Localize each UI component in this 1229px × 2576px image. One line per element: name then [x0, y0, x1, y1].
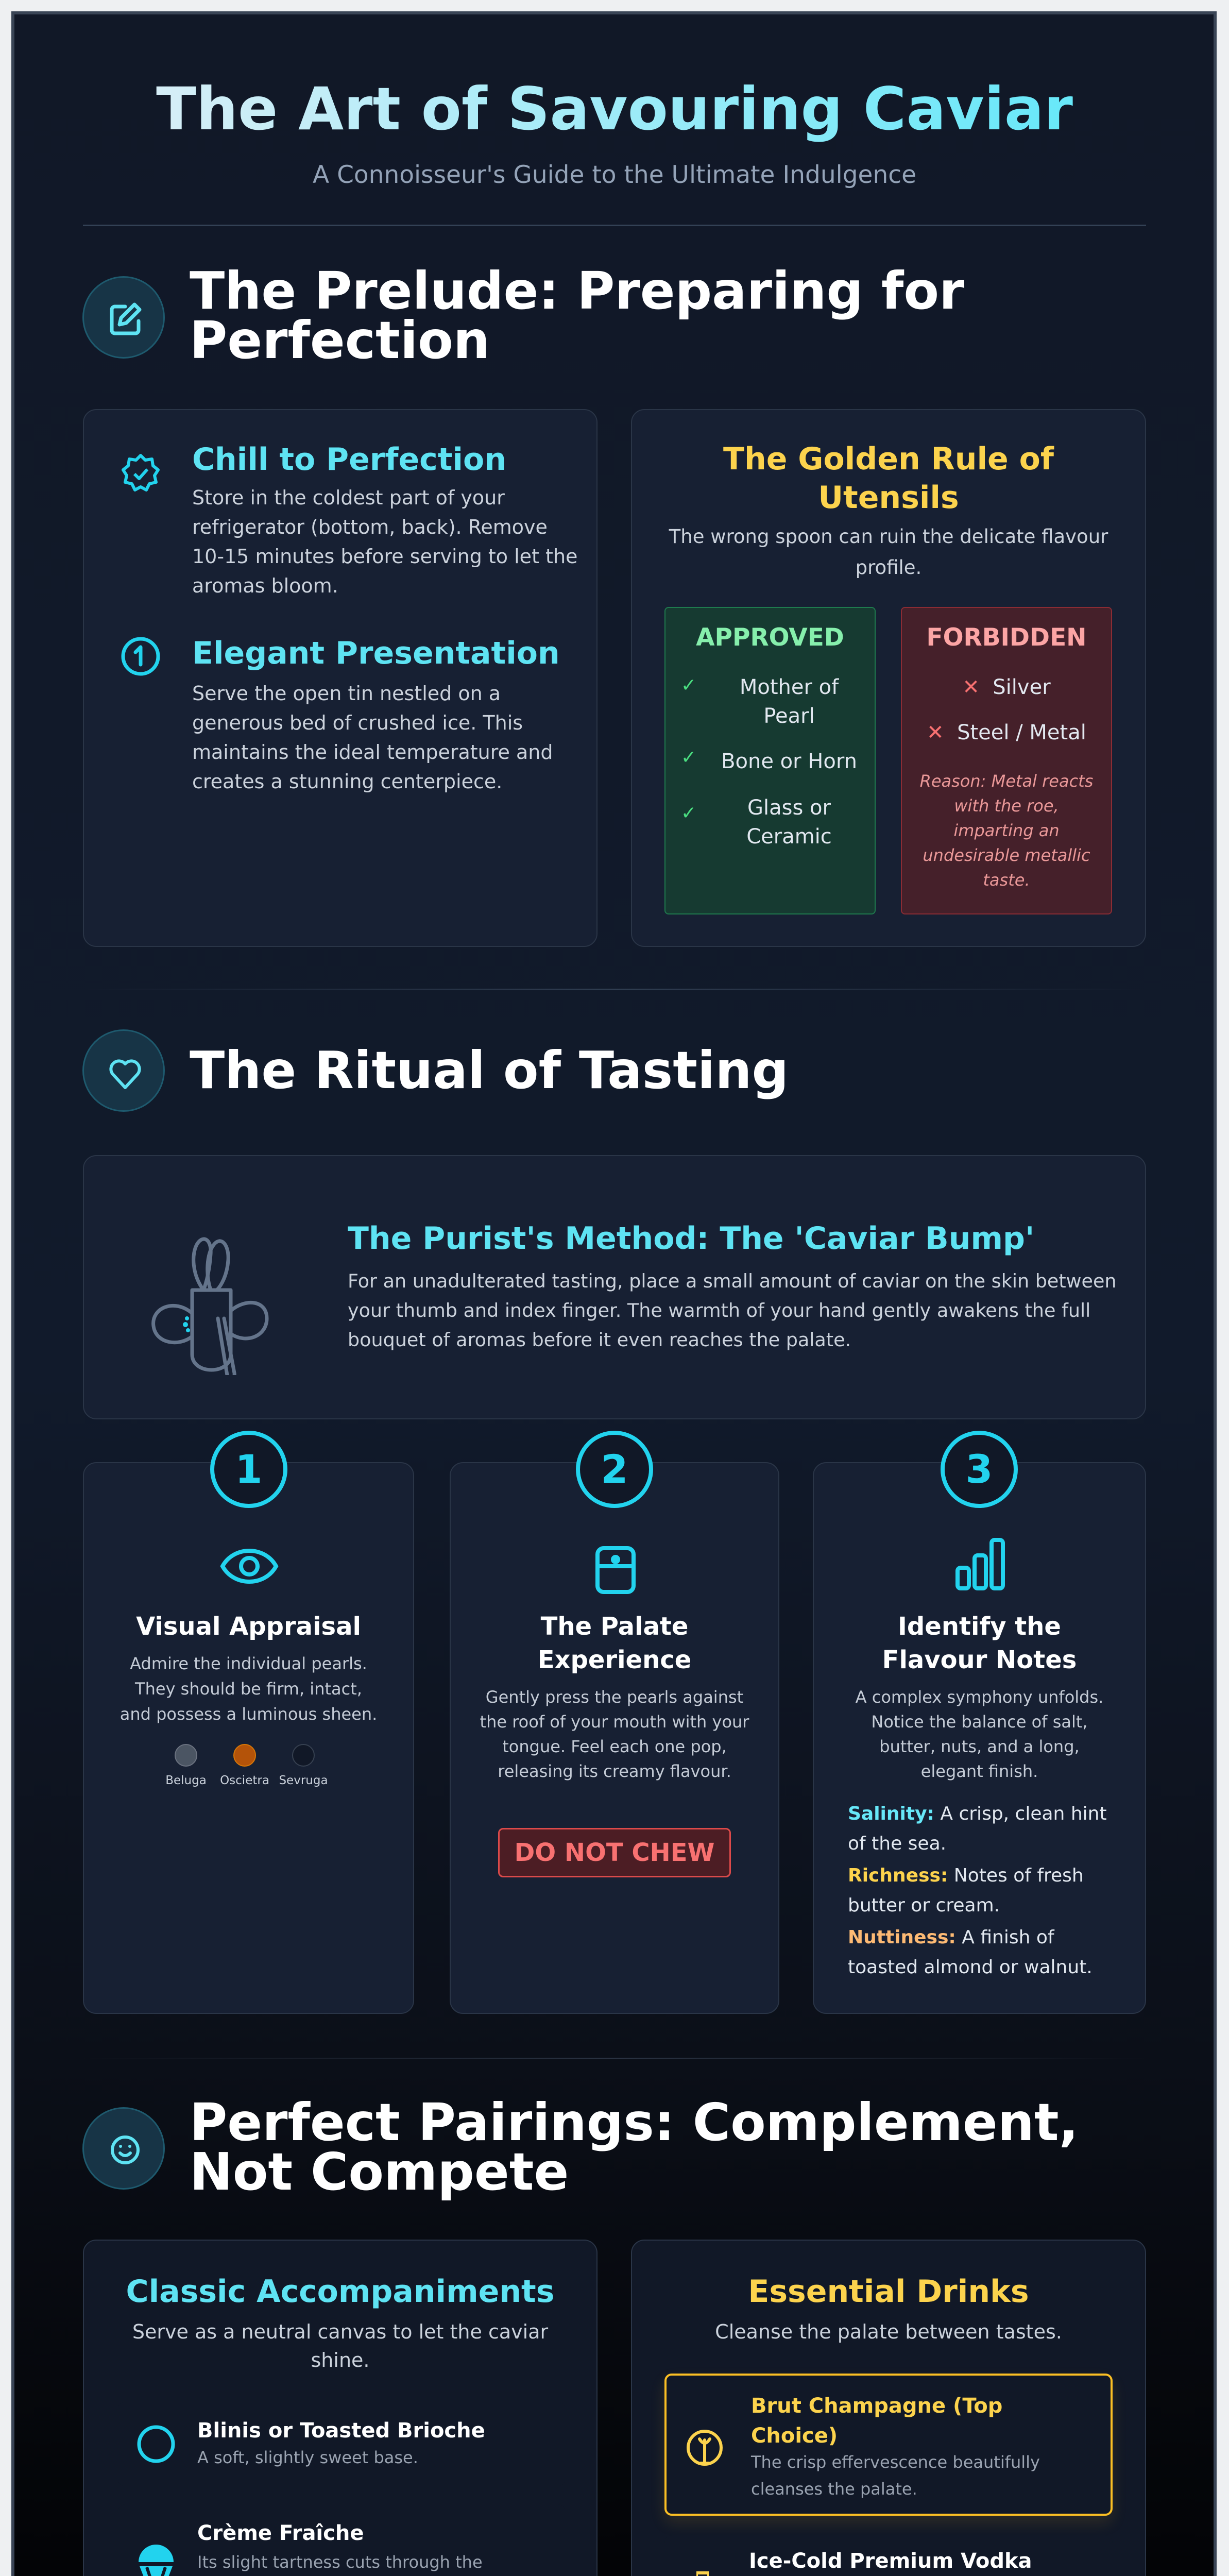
- icon: bars: [955, 1538, 1005, 1590]
- step title: The Palate: [541, 1612, 688, 1641]
- panel subtitle: The wrong spoon can ruin the delicate flavour profile.: [669, 526, 1108, 579]
- step text: Gently press the pearls against the roof of your mouth with your tongue. Feel each one pop, releasing its creamy flavour.: [480, 1687, 749, 1781]
- approved list: Glass or: [747, 796, 831, 820]
- tip text: chill: Store in the coldest part of your refrigerator (bottom, back). Remove 10-15 minutes before serving to let the aromas bloom.: [192, 486, 577, 597]
- heading: prelude: Perfection: [190, 310, 490, 370]
- panel subtitle: Serve as a neutral canvas to let the caviar shine.: [132, 2320, 548, 2371]
- icon: mouth: [595, 1546, 636, 1594]
- approved list: ✓: [681, 747, 696, 768]
- caviar colour swatches: Sevruga: [279, 1774, 328, 1787]
- section icon: smile: [82, 2107, 165, 2190]
- icon: eye: [220, 1549, 278, 1584]
- heading: pairings: Not Compete: [190, 2142, 569, 2202]
- panel heading: Classic Accompaniments: [126, 2274, 554, 2310]
- panel: prelude tips: [83, 409, 598, 947]
- step text: A complex symphony unfolds. Notice the balance of salt, butter, nuts, and a long, elegant finish.: [856, 1687, 1103, 1781]
- tip text: presentation: Serve the open tin nestled on a generous bed of crushed ice. This maintains the ideal temperature and creates a stunning centerpiece.: [192, 682, 553, 793]
- heading: pairings: Perfect Pairings: Complement,: [190, 2092, 1079, 2153]
- section icon: pencil: [82, 276, 165, 359]
- approved list: Ceramic: [746, 825, 832, 849]
- step card 3: [813, 1462, 1146, 2014]
- item: creme fraiche: [118, 2504, 565, 2576]
- item: champagne: The crisp effervescence beautifully cleanses the palate.: [751, 2452, 1040, 2499]
- approved list: Mother of: [740, 675, 839, 699]
- approved list: Pearl: [763, 704, 815, 728]
- forbidden list: ✕ Silver: [962, 675, 1051, 699]
- panel subtitle: Cleanse the palate between tastes.: [715, 2320, 1062, 2343]
- flavour notes list: Salinity: A crisp, clean hint of the sea.: [848, 1803, 1107, 1854]
- item: champagne: [664, 2374, 1113, 2516]
- step number 1: [210, 1431, 287, 1508]
- forbidden list: Reason: Metal reacts with the roe, imparting an undesirable metallic taste.: [920, 771, 1093, 890]
- flavour notes list: [848, 1803, 1107, 1978]
- panel heading: The Golden Rule of: [723, 441, 1054, 477]
- heading: pairings: [190, 2092, 1079, 2202]
- step card 2: [450, 1462, 779, 2014]
- item: champagne: Brut Champagne (Top Choice): [751, 2394, 1002, 2448]
- step number 1: 1: [235, 1446, 262, 1492]
- forbidden list: [901, 607, 1112, 914]
- item: blinis: A soft, slightly sweet base.: [197, 2448, 418, 2467]
- icon: hand: [151, 1237, 269, 1375]
- approved list: ✓: [681, 803, 696, 824]
- panel: purist method: [83, 1155, 1146, 1419]
- forbidden list: ✕ Steel / Metal: [927, 721, 1086, 744]
- icon: clock: [122, 637, 160, 676]
- panel: drinks: [631, 2240, 1146, 2576]
- caviar colour swatches: Oscietra: [220, 1774, 269, 1787]
- step title: [538, 1612, 691, 1674]
- item: blinis: Blinis or Toasted Brioche: [197, 2419, 485, 2443]
- caviar colour swatches: [165, 1744, 328, 1787]
- approved list: Bone or Horn: [721, 750, 857, 773]
- section icon: heart: [82, 1029, 165, 1112]
- title: The Art of Savouring Caviar: [156, 75, 1073, 143]
- tip heading: chill: Chill to Perfection: [192, 442, 506, 478]
- caviar colour swatches: Beluga: [165, 1774, 207, 1787]
- step text: Admire the individual pearls. They should be firm, intact, and possess a luminous sheen.: [120, 1654, 377, 1724]
- panel heading: [723, 441, 1054, 516]
- panel: accompaniments: [83, 2240, 598, 2576]
- step title: Experience: [538, 1646, 691, 1674]
- item: creme fraiche: Crème Fraîche: [197, 2521, 364, 2545]
- panel: golden rule: [631, 409, 1146, 947]
- approved list: APPROVED: [696, 623, 844, 652]
- flavour notes list: Nuttiness: A finish of toasted almond or walnut.: [848, 1927, 1093, 1978]
- tip heading: presentation: Elegant Presentation: [192, 635, 560, 671]
- panel heading: Essential Drinks: [748, 2274, 1029, 2310]
- step number 2: 2: [601, 1446, 628, 1492]
- step title: Visual Appraisal: [136, 1612, 361, 1641]
- step card 1: [83, 1462, 414, 2014]
- approved list: [664, 607, 876, 914]
- panel heading: Utensils: [818, 480, 959, 516]
- item: blinis: [118, 2402, 565, 2486]
- icon: badge: [122, 454, 160, 492]
- flavour notes list: Richness: Notes of fresh butter or cream.: [848, 1865, 1084, 1916]
- warning badge: [498, 1828, 731, 1877]
- step title: Flavour Notes: [882, 1646, 1077, 1674]
- item: vodka: [664, 2535, 1113, 2576]
- step title: [882, 1612, 1077, 1674]
- item: vodka: Ice-Cold Premium Vodka: [749, 2549, 1032, 2573]
- heading: prelude: [190, 261, 964, 370]
- step title: Identify the: [898, 1612, 1061, 1641]
- subtitle: A Connoisseur's Guide to the Ultimate Indulgence: [313, 161, 916, 189]
- warning badge: DO NOT CHEW: [515, 1838, 714, 1867]
- heading: prelude: The Prelude: Preparing for: [190, 261, 964, 321]
- forbidden list: FORBIDDEN: [926, 623, 1087, 652]
- purist text: For an unadulterated tasting, place a small amount of caviar on the skin between your thumb and index finger. The warmth of your hand gently awakens the full bouquet of aromas before it even reaches the palate.: [348, 1270, 1117, 1351]
- purist heading: The Purist's Method: The 'Caviar Bump': [348, 1221, 1034, 1257]
- step number 2: [576, 1431, 653, 1508]
- step number 3: [941, 1431, 1018, 1508]
- heading: ritual: The Ritual of Tasting: [190, 1040, 789, 1100]
- approved list: ✓: [681, 675, 696, 696]
- step number 3: 3: [966, 1446, 993, 1492]
